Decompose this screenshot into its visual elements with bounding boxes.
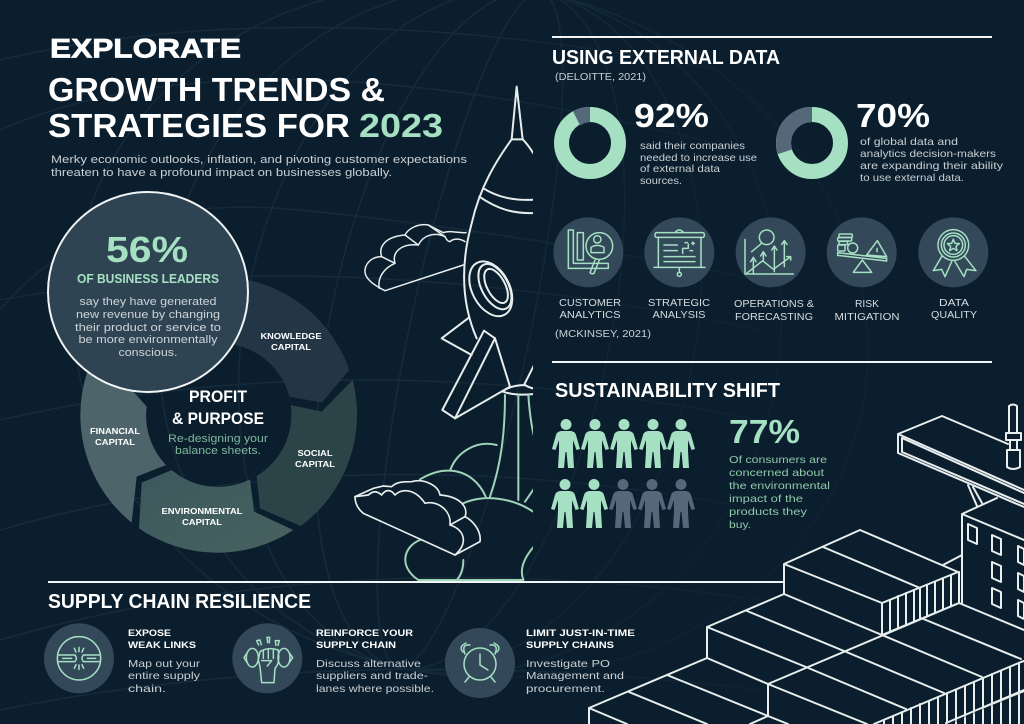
- citation: Deloitte: (DELOITTE, 2021): [555, 72, 646, 83]
- icon labels: OPERATIONS &: [734, 298, 814, 310]
- icon: data quality: [918, 217, 988, 287]
- text: limit just-in-time supply chains: Investigate PO: [526, 658, 610, 670]
- intro paragraph: [51, 154, 468, 179]
- stat: 70% donut: [776, 97, 1004, 184]
- title: 2023: [359, 107, 443, 144]
- wheel labels: CAPITAL: [182, 517, 222, 527]
- stat: 92% donut: needed to increase use: [640, 152, 757, 164]
- text: reinforce your supply chain: REINFORCE YOUR: [316, 628, 413, 639]
- wheel labels: FINANCIAL: [90, 426, 140, 436]
- stat: 70% donut: analytics decision-makers: [860, 148, 996, 160]
- stat: 92% donut: said their companies: [640, 140, 745, 152]
- wheel labels: CAPITAL: [295, 459, 335, 469]
- text: limit just-in-time supply chains: LIMIT JUST-IN-TIME: [526, 628, 635, 639]
- text: expose weak links: Map out your: [128, 658, 201, 670]
- icon: strategic analysis: [644, 217, 714, 287]
- text: reinforce your supply chain: Discuss alternative: [316, 658, 421, 670]
- stat: 77%: impact of the: [729, 493, 803, 505]
- title: GROWTH TRENDS &: [48, 71, 385, 108]
- text: expose weak links: chain.: [128, 683, 166, 695]
- heading: using external data: USING EXTERNAL DATA: [552, 47, 780, 69]
- stat: 77%: concerned about: [729, 467, 824, 479]
- cloud: upper: [365, 225, 466, 291]
- wheel centre text: balance sheets.: [175, 445, 261, 457]
- rule into container stack: [48, 581, 784, 583]
- stat: 92% donut: of external data: [640, 163, 720, 175]
- icon labels: DATA: [939, 297, 969, 309]
- text: reinforce your supply chain: lanes where possible.: [316, 683, 434, 695]
- icon labels: ANALYTICS: [560, 309, 620, 321]
- illustration: container ship: [589, 404, 1024, 724]
- cloud: lower: [355, 481, 480, 555]
- wheel centre text: & PURPOSE: [172, 409, 264, 428]
- stat: 77%: [729, 413, 830, 531]
- title: [48, 71, 443, 144]
- segment: social capital: [257, 380, 357, 526]
- segment: knowledge capital: [163, 277, 349, 403]
- stat: 70% donut: to use external data.: [860, 172, 964, 184]
- icon: broken chain: [44, 623, 114, 693]
- text: expose weak links: [128, 628, 201, 695]
- stat: 77%: products they: [729, 506, 808, 518]
- stat: 77%: buy.: [729, 519, 751, 531]
- heading: sustainability shift: SUSTAINABILITY SHIFT: [555, 380, 780, 402]
- text: reinforce your supply chain: SUPPLY CHAIN: [316, 640, 396, 651]
- callout: 56% of business leaders: their product or service to: [75, 322, 221, 334]
- callout: 56% of business leaders: 56%: [106, 229, 188, 270]
- text: limit just-in-time supply chains: [526, 628, 635, 695]
- text: reinforce your supply chain: suppliers and trade-: [316, 670, 429, 682]
- stat: 92% donut: [562, 97, 757, 187]
- text: expose weak links: entire supply: [128, 670, 201, 682]
- intro paragraph: threaten to have a profound impact on businesses globally.: [51, 167, 392, 179]
- text: expose weak links: WEAK LINKS: [128, 640, 196, 651]
- callout: 56% of business leaders: say they have generated: [80, 296, 216, 308]
- callout: 56% of business leaders: be more environmentally: [78, 334, 218, 346]
- icon: alarm clock: [445, 628, 515, 698]
- icon labels: STRATEGIC: [648, 297, 710, 309]
- text: limit just-in-time supply chains: Management and: [526, 670, 624, 682]
- wheel labels: CAPITAL: [271, 342, 311, 352]
- stat: 92% donut: 92%: [634, 97, 709, 134]
- text: reinforce your supply chain: [316, 628, 434, 695]
- stat: 70% donut: are expanding their ability: [860, 160, 1004, 172]
- stat: 77%: the environmental: [729, 480, 830, 492]
- stat: 77%: Of consumers are: [729, 454, 827, 466]
- title: STRATEGIES FOR: [48, 107, 350, 144]
- text: limit just-in-time supply chains: procurement.: [526, 683, 605, 695]
- text: limit just-in-time supply chains: SUPPLY CHAINS: [526, 640, 614, 651]
- icon: fist with dumbbell: [232, 623, 302, 693]
- citation: McKinsey: (MCKINSEY, 2021): [555, 329, 651, 340]
- wheel centre text: Re-designing your: [168, 433, 268, 445]
- stat: 77%: 77%: [729, 413, 800, 450]
- heading: supply chain resilience: SUPPLY CHAIN RESILIENCE: [48, 591, 311, 613]
- pictogram: 7 of 10 people: [551, 419, 695, 528]
- icon: risk mitigation: [827, 217, 897, 287]
- callout: 56% of business leaders: OF BUSINESS LEADERS: [77, 272, 219, 286]
- wheel centre text: PROFIT: [189, 387, 248, 406]
- wheel labels: KNOWLEDGE: [260, 331, 322, 341]
- callout: 56% of business leaders: conscious.: [118, 347, 178, 359]
- wheel labels: CAPITAL: [95, 437, 135, 447]
- callout: 56% of business leaders: new revenue by changing: [76, 309, 220, 321]
- callout: 56% of business leaders: [48, 192, 248, 392]
- icon labels: RISK: [855, 298, 879, 310]
- segment: financial capital: [80, 350, 166, 523]
- stat: 70% donut: of global data and: [860, 136, 958, 148]
- icon labels: FORECASTING: [735, 311, 813, 323]
- logo: Explorate: EXPLORATE: [50, 34, 241, 64]
- wheel labels: SOCIAL: [298, 448, 332, 458]
- icon labels: ANALYSIS: [652, 309, 706, 321]
- wheel centre text: [168, 387, 268, 457]
- rocket illustration: [405, 87, 543, 580]
- icon labels: [559, 297, 977, 323]
- stat: 92% donut: sources.: [640, 175, 682, 187]
- icon: operations and forecasting: [736, 217, 806, 287]
- icon labels: MITIGATION: [834, 311, 900, 323]
- stat: 70% donut: 70%: [856, 97, 930, 134]
- intro paragraph: Merky economic outlooks, inflation, and pivoting customer expectations: [51, 154, 468, 166]
- wheel labels: [90, 331, 335, 527]
- icon labels: QUALITY: [931, 309, 977, 321]
- wheel labels: ENVIRONMENTAL: [162, 506, 242, 516]
- panel: wheel diagram: [80, 277, 357, 553]
- segment: environmental capital: [139, 470, 293, 553]
- icon: customer analytics: [553, 217, 623, 287]
- text: expose weak links: EXPOSE: [128, 628, 171, 639]
- icon labels: CUSTOMER: [559, 297, 621, 309]
